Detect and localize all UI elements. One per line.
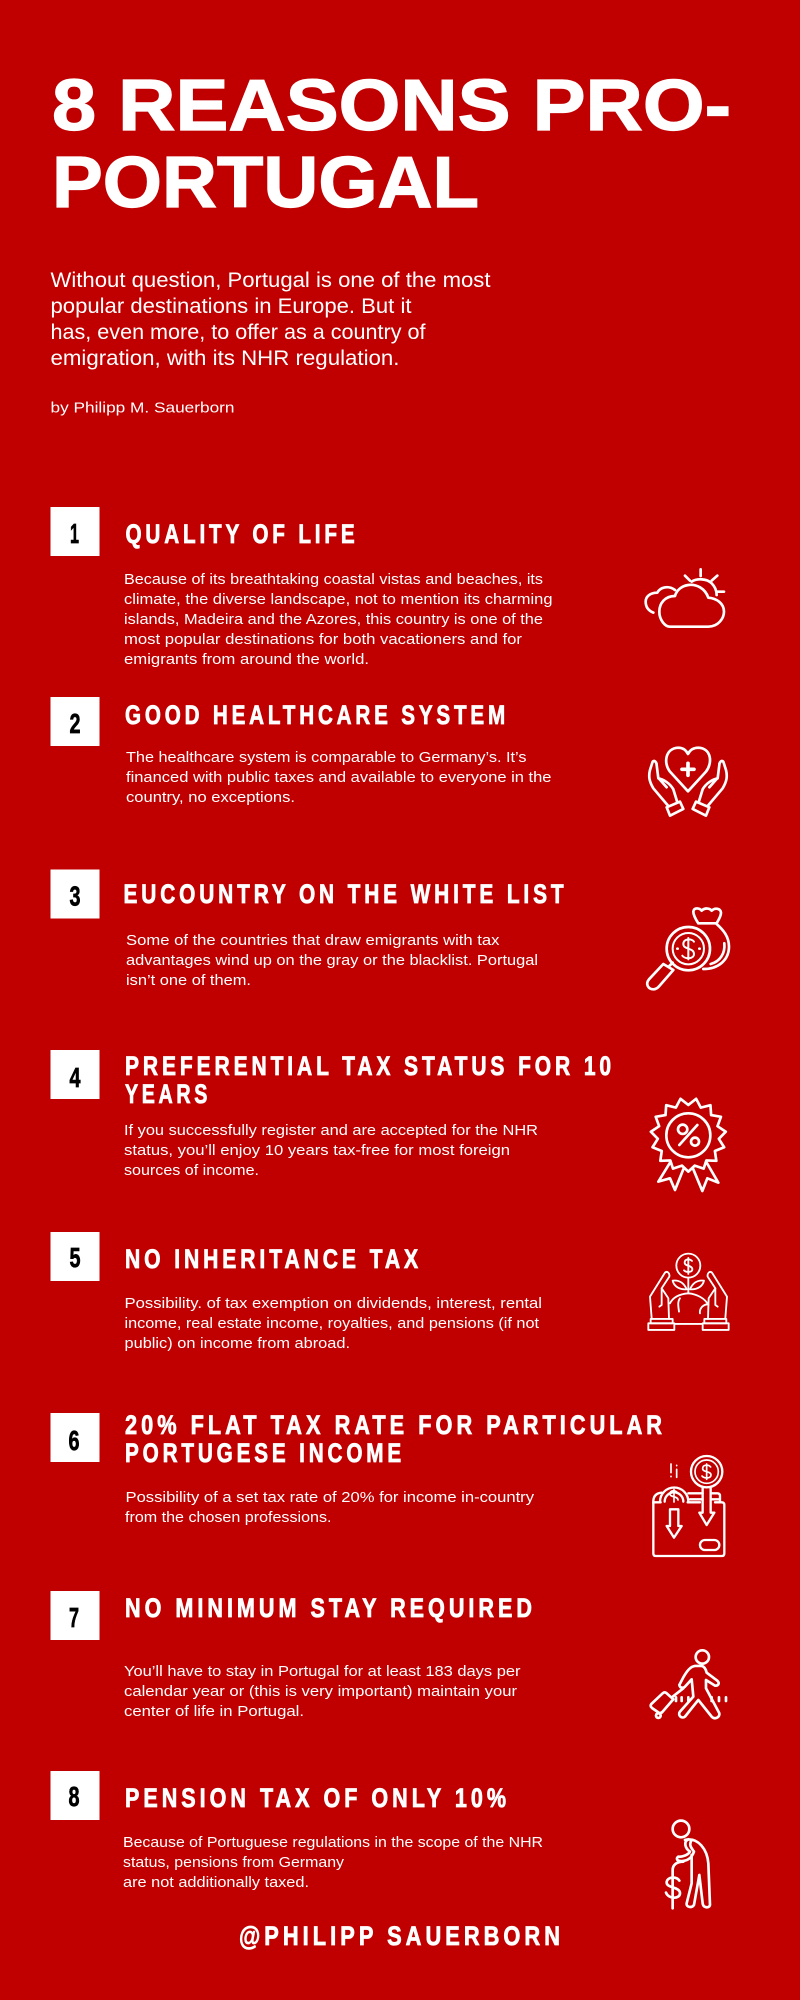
heading 2: GOOD HEALTHCARE SYSTEM bbox=[125, 700, 509, 730]
heading 7: NO MINIMUM STAY REQUIRED bbox=[125, 1593, 536, 1623]
icon: hands with money plant bbox=[648, 1254, 729, 1330]
body text 5: Possibility. of tax exemption on dividends, interest, rental bbox=[124, 1295, 542, 1312]
body text 6: from the chosen professions. bbox=[125, 1509, 332, 1526]
number box 2: 2 bbox=[70, 708, 80, 739]
body text 2: The healthcare system is comparable to Germany’s. It’s bbox=[126, 749, 527, 766]
body text 8: Because of Portuguese regulations in the scope of the NHR bbox=[123, 1834, 543, 1851]
intro text: has, even more, to offer as a country of bbox=[50, 320, 426, 344]
heading 6: PORTUGESE INCOME bbox=[125, 1438, 405, 1468]
body text 8 bbox=[123, 1834, 543, 1891]
icon: elderly person with cane and dollar bbox=[666, 1821, 710, 1908]
icon: percent rosette bbox=[651, 1099, 726, 1191]
panel: reason 3 bbox=[50, 870, 729, 989]
body text 5 bbox=[124, 1295, 542, 1352]
number box 6 bbox=[50, 1413, 100, 1462]
number box 1: 1 bbox=[70, 518, 79, 549]
icon: traveller with suitcase bbox=[651, 1650, 726, 1718]
number box 4: 4 bbox=[70, 1062, 81, 1093]
heading 4: PREFERENTIAL TAX STATUS FOR 10 bbox=[125, 1051, 615, 1081]
body text 7: center of life in Portugal. bbox=[124, 1703, 304, 1720]
panel: reason 2 bbox=[50, 697, 727, 816]
heading 8: PENSION TAX OF ONLY 10% bbox=[125, 1783, 510, 1813]
panel: reason 4 bbox=[50, 1050, 726, 1191]
heading 6 bbox=[125, 1410, 666, 1468]
number box 5: 5 bbox=[70, 1242, 80, 1273]
body text 8: are not additionally taxed. bbox=[123, 1874, 309, 1891]
body text 1: emigrants from around the world. bbox=[124, 651, 369, 668]
intro text: Without question, Portugal is one of the most bbox=[50, 268, 491, 292]
title: 8 REASONS PRO- bbox=[52, 66, 731, 146]
body text 5: public) on income from abroad. bbox=[124, 1335, 350, 1352]
body text 2 bbox=[126, 749, 552, 806]
body text 3: isn’t one of them. bbox=[126, 972, 251, 989]
body text 2: financed with public taxes and available to everyone in the bbox=[126, 769, 552, 786]
byline: by Philipp M. Sauerborn bbox=[50, 400, 234, 416]
body text 3 bbox=[126, 932, 538, 989]
panel: reason 7 bbox=[50, 1591, 726, 1720]
body text 1: Because of its breathtaking coastal vistas and beaches, its bbox=[124, 571, 543, 588]
body text 2: country, no exceptions. bbox=[126, 789, 295, 806]
intro text: popular destinations in Europe. But it bbox=[50, 294, 412, 318]
panel: reason 1 bbox=[50, 507, 724, 668]
icon: magnifier and money bag bbox=[647, 908, 729, 989]
body text 4: status, you’ll enjoy 10 years tax-free for most foreign bbox=[124, 1142, 510, 1159]
number box 6: 6 bbox=[68, 1425, 80, 1456]
body text 1: climate, the diverse landscape, not to mention its charming bbox=[124, 591, 552, 608]
number box 7: 7 bbox=[69, 1602, 79, 1633]
heading 5: NO INHERITANCE TAX bbox=[125, 1244, 422, 1274]
number box 7 bbox=[50, 1591, 100, 1640]
number box 3 bbox=[50, 870, 100, 918]
panel: reason 5 bbox=[50, 1232, 729, 1352]
number box 4 bbox=[50, 1050, 100, 1099]
icon: hands holding heart bbox=[649, 748, 727, 816]
panel: reason 8 bbox=[50, 1771, 710, 1908]
body text 7: You’ll have to stay in Portugal for at least 183 days per bbox=[124, 1663, 520, 1680]
heading 4 bbox=[125, 1051, 615, 1109]
body text 1: islands, Madeira and the Azores, this country is one of the bbox=[124, 611, 543, 628]
body text 6 bbox=[125, 1489, 534, 1526]
body text 1: most popular destinations for both vacationers and for bbox=[124, 631, 522, 648]
footer handle: @PHILIPP SAUERBORN bbox=[239, 1921, 564, 1951]
heading 4: YEARS bbox=[125, 1079, 211, 1109]
heading 6: 20% FLAT TAX RATE FOR PARTICULAR bbox=[125, 1410, 666, 1440]
number box 3: 3 bbox=[70, 880, 80, 912]
panel: reason 6 bbox=[50, 1410, 724, 1556]
number box 8: 8 bbox=[68, 1781, 80, 1812]
heading 3: EUCOUNTRY ON THE WHITE LIST bbox=[124, 879, 568, 909]
body text 1 bbox=[124, 571, 552, 668]
body text 4 bbox=[124, 1122, 538, 1179]
body text 6: Possibility of a set tax rate of 20% for income in-country bbox=[126, 1489, 534, 1506]
body text 4: sources of income. bbox=[124, 1162, 259, 1179]
body text 7 bbox=[124, 1663, 520, 1720]
title bbox=[52, 66, 731, 223]
number box 2 bbox=[50, 697, 100, 746]
number box 1 bbox=[50, 507, 100, 556]
heading 1: QUALITY OF LIFE bbox=[126, 519, 358, 549]
body text 4: If you successfully register and are accepted for the NHR bbox=[124, 1122, 538, 1139]
title: PORTUGAL bbox=[52, 143, 479, 223]
body text 5: income, real estate income, royalties, and pensions (if not bbox=[124, 1315, 540, 1332]
body text 3: advantages wind up on the gray or the blacklist. Portugal bbox=[126, 952, 538, 969]
body text 3: Some of the countries that draw emigrants with tax bbox=[126, 932, 500, 949]
number box 8 bbox=[50, 1771, 100, 1820]
icon: cloud and sun bbox=[646, 569, 724, 627]
icon: wallet with coins and arrows bbox=[653, 1456, 724, 1556]
number box 5 bbox=[50, 1232, 100, 1281]
body text 8: status, pensions from Germany bbox=[123, 1854, 344, 1871]
intro text bbox=[50, 268, 491, 370]
intro text: emigration, with its NHR regulation. bbox=[50, 346, 400, 370]
body text 7: calendar year or (this is very important) maintain your bbox=[124, 1683, 517, 1700]
